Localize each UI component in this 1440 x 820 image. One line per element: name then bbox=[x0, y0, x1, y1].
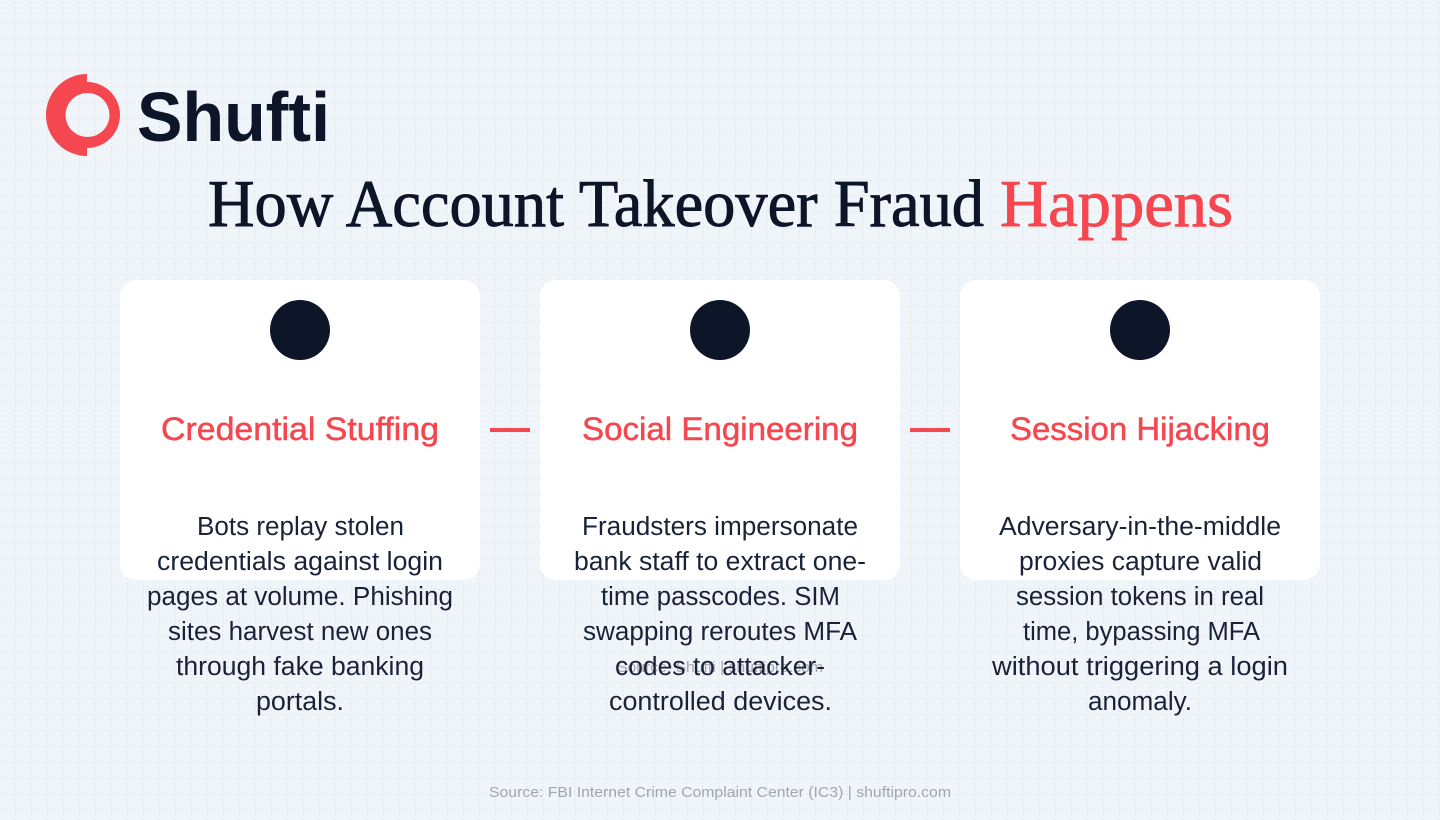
overlapped source note: Source: Shufti | shuftipro.com bbox=[617, 659, 823, 676]
panel: session hijacking card bbox=[960, 280, 1320, 580]
panel: social engineering card bbox=[540, 280, 900, 580]
icon: social engineering dot bbox=[690, 300, 750, 360]
icon: credential stuffing dot bbox=[270, 300, 330, 360]
text block: social engineering description: codes to attacker- bbox=[615, 653, 825, 681]
text block: credential stuffing description: pages at volume. Phishing bbox=[147, 583, 453, 611]
text block: session hijacking description: without triggering a login bbox=[991, 653, 1288, 681]
logo: Shufti bbox=[46, 74, 330, 156]
footer source: Source: FBI Internet Crime Complaint Center (IC3) | shuftipro.com bbox=[489, 784, 951, 801]
text block: session hijacking description: session tokens in real bbox=[1016, 583, 1264, 611]
icon: logo ring bbox=[46, 74, 120, 156]
text block: social engineering description bbox=[574, 513, 866, 716]
icon: session hijacking dot bbox=[1110, 300, 1170, 360]
panel: credential stuffing card bbox=[120, 280, 480, 580]
text block: session hijacking description: Adversary-in-the-middle bbox=[999, 513, 1281, 541]
arrow: connector one bbox=[490, 428, 530, 432]
text block: social engineering description: Fraudsters impersonate bbox=[582, 513, 858, 541]
heading: social engineering: Social Engineering bbox=[582, 411, 858, 447]
title: Happens bbox=[1000, 167, 1233, 241]
logo wordmark: Shufti bbox=[137, 78, 330, 156]
text block: social engineering description: controlled devices. bbox=[609, 688, 832, 716]
text block: credential stuffing description: sites harvest new ones bbox=[168, 618, 432, 646]
text block: credential stuffing description bbox=[147, 513, 453, 716]
heading: session hijacking: Session Hijacking bbox=[1010, 411, 1270, 447]
text block: session hijacking description bbox=[991, 513, 1288, 716]
text block: credential stuffing description: Bots replay stolen bbox=[197, 513, 404, 541]
text block: social engineering description: swapping reroutes MFA bbox=[583, 618, 857, 646]
text block: credential stuffing description: portals. bbox=[256, 688, 344, 716]
heading: credential stuffing: Credential Stuffing bbox=[161, 411, 439, 447]
arrow: connector two bbox=[910, 428, 950, 432]
text block: session hijacking description: time, bypassing MFA bbox=[1023, 618, 1260, 646]
text block: credential stuffing description: credentials against login bbox=[157, 548, 443, 576]
title: How Account Takeover Fraud bbox=[208, 167, 984, 241]
text block: social engineering description: bank staff to extract one- bbox=[574, 548, 866, 576]
text block: social engineering description: time passcodes. SIM bbox=[601, 583, 840, 611]
text block: session hijacking description: anomaly. bbox=[1088, 688, 1192, 716]
text block: credential stuffing description: through fake banking bbox=[176, 653, 424, 681]
text block: session hijacking description: proxies capture valid bbox=[1019, 548, 1262, 576]
